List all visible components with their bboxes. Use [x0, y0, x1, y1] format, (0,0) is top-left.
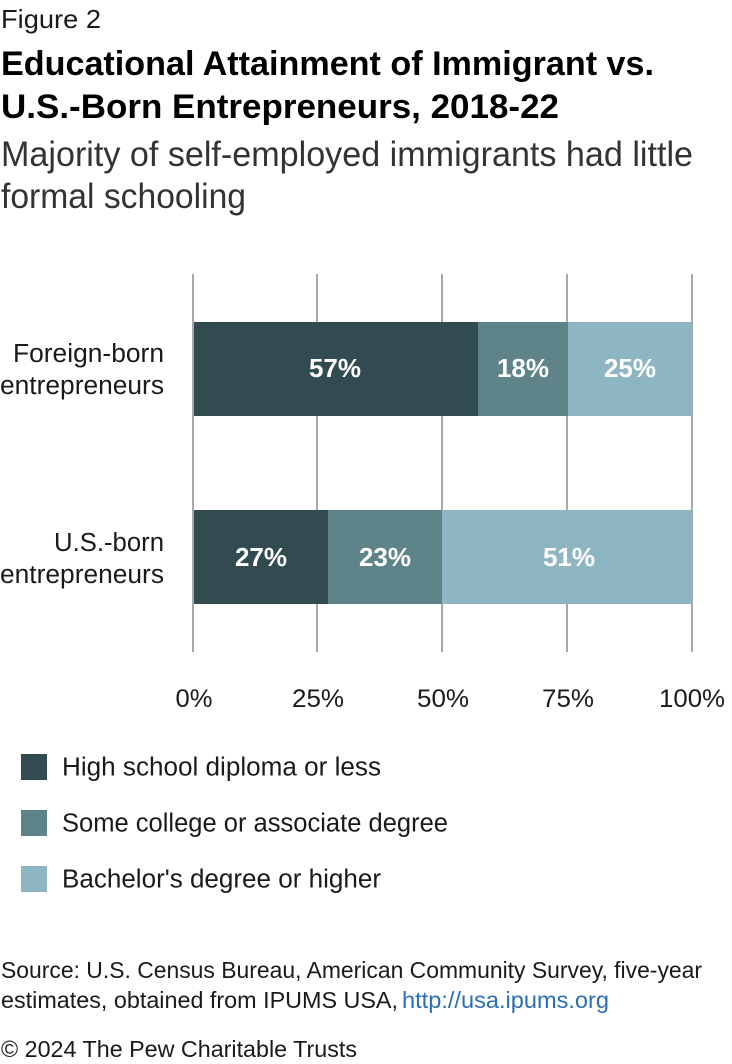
- copyright: © 2024 The Pew Charitable Trusts: [1, 1036, 357, 1062]
- bar: foreign-born: 25%: [604, 353, 656, 383]
- row label: foreign-born: [0, 340, 164, 400]
- source note: Source: U.S. Census Bureau, American Community Survey, five-year: [1, 957, 702, 983]
- row label: U.S.-born: [0, 529, 164, 589]
- bar: U.S.-born: 23%: [359, 542, 411, 572]
- legend item: high school: High school diploma or less: [62, 754, 381, 782]
- subtitle: Majority of self-employed immigrants had little: [1, 135, 693, 174]
- row label: U.S.-born: U.S.-born: [54, 529, 164, 557]
- title: U.S.-Born Entrepreneurs, 2018-22: [1, 88, 559, 126]
- row label: U.S.-born: entrepreneurs: [0, 561, 164, 589]
- subtitle: [1, 135, 693, 216]
- title: [1, 45, 654, 126]
- bar: U.S.-born: [194, 510, 692, 604]
- stacked bar chart: [0, 274, 725, 713]
- source note: estimates, obtained from IPUMS USA,: [1, 987, 398, 1013]
- row label: foreign-born: Foreign-born: [13, 340, 164, 368]
- x axis labels: 50%: [417, 685, 469, 713]
- legend item: bachelor's: Bachelor's degree or higher: [62, 866, 382, 894]
- subtitle: formal schooling: [1, 177, 246, 216]
- title: Educational Attainment of Immigrant vs.: [1, 45, 654, 83]
- bar: U.S.-born: 27%: [235, 542, 287, 572]
- bar: foreign-born: [194, 322, 692, 416]
- legend item: some college: Some college or associate degree: [62, 810, 448, 838]
- bar: U.S.-born: 51%: [543, 542, 595, 572]
- x axis labels: [176, 685, 725, 713]
- x axis labels: 75%: [542, 685, 594, 713]
- x axis labels: 100%: [659, 685, 725, 713]
- figure label: Figure 2: [1, 4, 101, 34]
- legend: [21, 754, 448, 894]
- x axis labels: 25%: [292, 685, 344, 713]
- source note: [1, 957, 702, 1013]
- x axis labels: 0%: [176, 685, 212, 713]
- row label: foreign-born: entrepreneurs: [0, 372, 164, 400]
- source note: http://usa.ipums.org: [402, 987, 609, 1013]
- bar: foreign-born: 18%: [497, 353, 549, 383]
- bar: foreign-born: 57%: [309, 353, 361, 383]
